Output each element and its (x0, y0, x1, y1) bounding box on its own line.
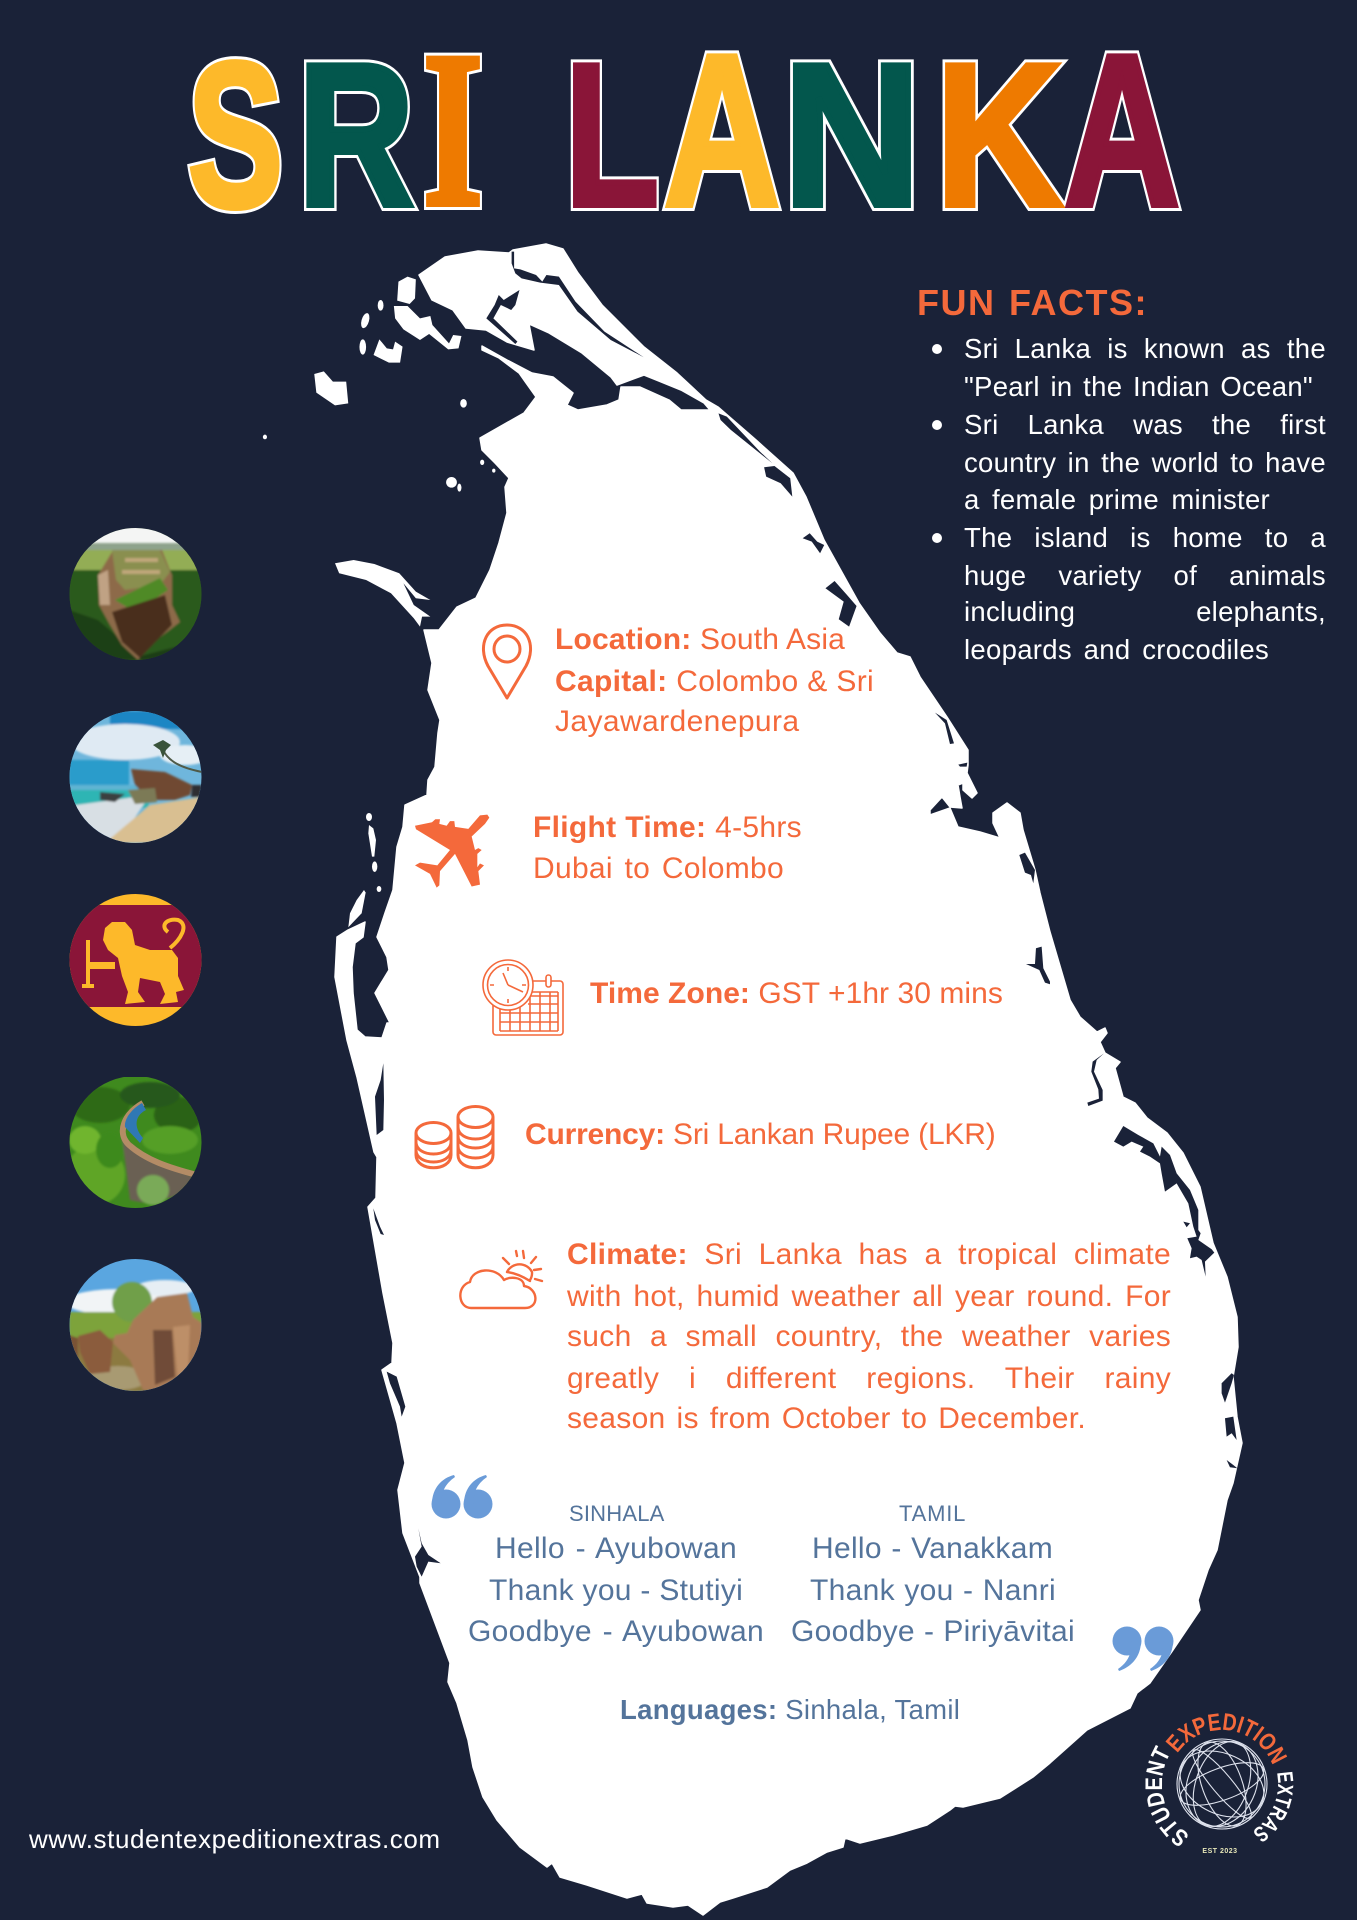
text: Sri Lanka was the first (964, 409, 1326, 440)
bullet 1 (932, 344, 942, 354)
text: a female prime minister (964, 484, 1270, 515)
flight time (533, 811, 802, 885)
title: S (188, 20, 283, 250)
title: K (936, 22, 1062, 249)
website: www.studentexpeditionextras.com (29, 1824, 441, 1854)
bullet 3 (932, 533, 942, 543)
photo: beach with rock and palm (69, 711, 210, 843)
logo: Student Expedition Extras: EXTRAS (1254, 1772, 1294, 1842)
fun facts heading: FUN FACTS: (917, 282, 1148, 323)
text: Dubai to Colombo (533, 852, 784, 885)
text: The island is home to a (964, 522, 1326, 553)
title: A (664, 9, 780, 251)
icon: clock and calendar (483, 960, 563, 1035)
text: country in the world to have (964, 447, 1326, 478)
text: including elephants, (964, 596, 1326, 627)
text: Location: South Asia (555, 623, 845, 656)
text: Thank you - Stutiyi (489, 1574, 743, 1607)
title (188, 7, 1180, 253)
text: with hot, humid weather all year round. For (567, 1280, 1171, 1313)
text: Jayawardenepura (555, 705, 800, 738)
title: R (298, 22, 414, 249)
icon: sun and cloud (460, 1251, 542, 1308)
text: greatly i different regions. Their rainy (567, 1362, 1171, 1395)
climate (567, 1238, 1171, 1435)
photo: Nine Arches bridge with train (65, 1077, 202, 1209)
text: Climate: Sri Lanka has a tropical climate (567, 1238, 1171, 1271)
photo: elephants bathing (65, 1259, 202, 1392)
tamil phrases (791, 1501, 1075, 1648)
title: A (1064, 9, 1180, 251)
logo: Student Expedition Extras: EST 2023 (1202, 1848, 1238, 1855)
text: Goodbye - Ayubowan (468, 1615, 764, 1648)
text: Thank you - Nanri (810, 1574, 1056, 1607)
title: N (783, 22, 921, 249)
currency: Currency: Sri Lankan Rupee (LKR) (525, 1118, 996, 1151)
icon: location pin (483, 625, 531, 698)
text: huge variety of animals (964, 560, 1326, 591)
bullet 2 (932, 420, 942, 430)
photo: Sigiriya rock (69, 528, 202, 660)
title: I (423, 7, 483, 253)
logo: Student Expedition Extras: EXPEDITION (1166, 1713, 1288, 1764)
photo: Sri Lankan flag with lion (69, 894, 202, 1026)
text: Goodbye - Piriyāvitai (791, 1615, 1075, 1648)
fun facts list (932, 333, 1326, 665)
text: SINHALA (569, 1501, 665, 1526)
icon: opening quote (432, 1475, 492, 1518)
text: such a small country, the weather varies (567, 1320, 1171, 1353)
title: A (1064, 9, 1180, 251)
title: N (783, 22, 921, 249)
text: Hello - Vanakkam (812, 1532, 1053, 1565)
title: S (188, 20, 283, 250)
title: K (936, 22, 1062, 249)
icon: closing quote (1112, 1626, 1174, 1671)
sinhala phrases (468, 1501, 764, 1648)
title: L (565, 22, 659, 249)
text: leopards and crocodiles (964, 634, 1269, 665)
text: Sri Lanka is known as the (964, 333, 1326, 364)
icon: airplane (415, 815, 489, 888)
title: R (298, 22, 414, 249)
languages: Languages: Sinhala, Tamil (620, 1694, 960, 1725)
location and capital (555, 623, 874, 738)
title: A (664, 9, 780, 251)
logo: Student Expedition Extras (1146, 1713, 1294, 1855)
text: Capital: Colombo & Sri (555, 665, 874, 698)
text: Flight Time: 4-5hrs (533, 811, 802, 844)
text: season is from October to December. (567, 1402, 1086, 1435)
text: TAMIL (899, 1501, 966, 1526)
title: L (565, 22, 659, 249)
logo: Student Expedition Extras: STUDENT (1146, 1745, 1188, 1846)
text: "Pearl in the Indian Ocean" (964, 371, 1313, 402)
map of Sri Lanka (263, 244, 1242, 1915)
icon: coin stacks (416, 1106, 493, 1168)
title: I (423, 7, 483, 253)
time zone: Time Zone: GST +1hr 30 mins (590, 977, 1003, 1010)
text: Hello - Ayubowan (495, 1532, 737, 1565)
